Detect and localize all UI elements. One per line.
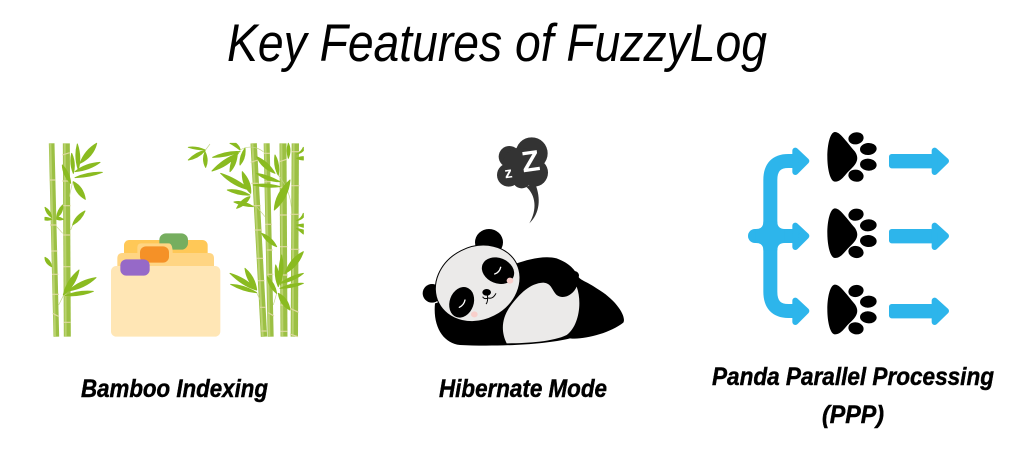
panel: bamboo indexing [45,143,303,403]
left bamboo [45,143,102,337]
panda body [435,257,624,346]
arrow 2 [889,226,946,247]
orange tab [140,246,169,263]
icon: paws and arrows [755,131,946,336]
green tab [159,233,188,250]
paw 3 [827,284,877,336]
icon: sleeping panda [422,137,624,346]
eye patches [445,253,518,321]
thought cloud [497,137,548,223]
cheeks [471,278,513,317]
ears [423,229,579,303]
head [422,231,533,336]
nose and mouth [482,289,496,304]
paw 1 [827,131,877,183]
right bamboo [188,143,303,337]
arrow 3 [889,301,946,322]
label: panda parallel processing: Panda Parallel Processing [712,363,994,391]
purple tab [120,259,150,276]
panel: hibernate mode [422,137,624,403]
folder back [124,240,208,280]
label: panda parallel processing: (PPP) [822,401,884,429]
icon: bamboo and folders [45,143,303,337]
sleep letters: z [504,164,514,182]
folder middle [117,243,214,287]
sleep letters [504,144,542,182]
folder front [111,266,220,337]
closed eyes [459,267,501,307]
paw 2 [827,207,877,259]
branching arrow [755,151,806,322]
title: Key Features of FuzzyLog [227,14,767,73]
label: hibernate mode: Hibernate Mode [439,375,607,403]
label: bamboo indexing: Bamboo Indexing [81,375,268,403]
sleep letters: Z [519,144,542,179]
belly [503,283,579,343]
arrow 1 [889,151,946,172]
panel: panda parallel processing [712,131,994,429]
label: panda parallel processing [712,363,994,429]
